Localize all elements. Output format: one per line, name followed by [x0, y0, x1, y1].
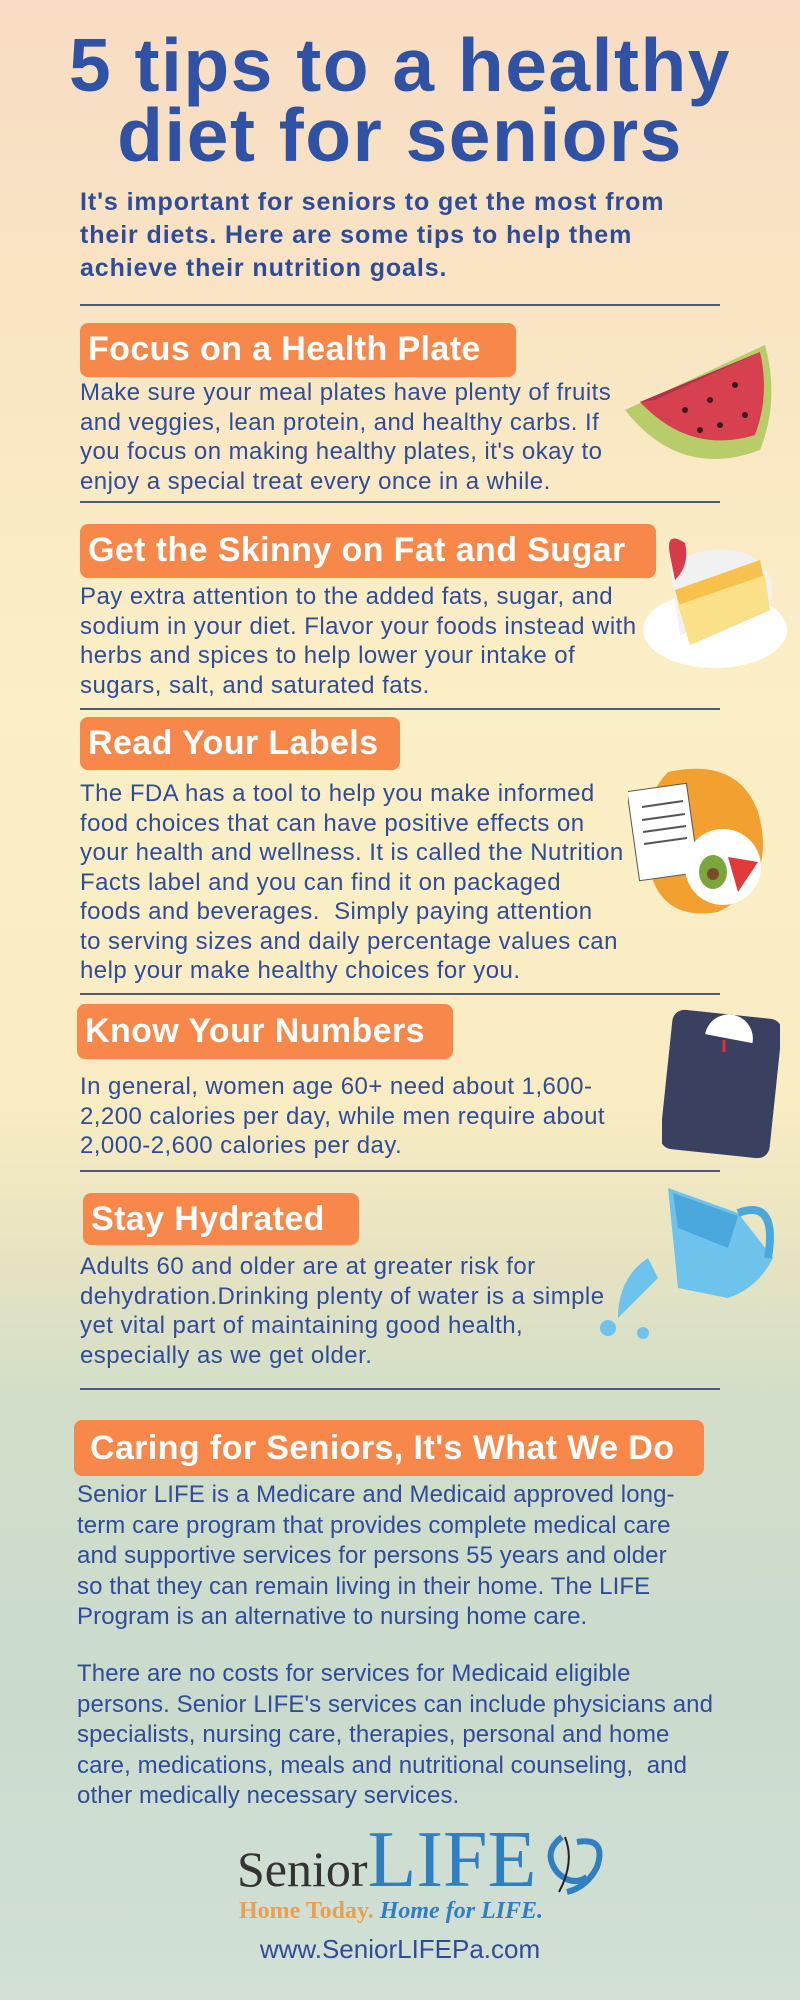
heading: labels: Read Your Labels [88, 724, 378, 762]
text: services: other medically necessary services. [77, 1782, 459, 1809]
heading: numbers [77, 1004, 453, 1059]
heading: fat and sugar: Get the Skinny on Fat and Sugar [88, 531, 626, 569]
text: labels: Facts label and you can find it on packaged [80, 868, 561, 896]
icon: water pitcher [600, 1188, 774, 1339]
text: numbers: In general, women age 60+ need about 1,600- [80, 1073, 592, 1100]
logo: SeniorLIFE [237, 1816, 536, 1904]
heading: hydrated [83, 1193, 359, 1245]
text: hydrated: dehydration.Drinking plenty of water is a simple [80, 1282, 605, 1310]
intro text [80, 188, 664, 282]
text: health plate: enjoy a special treat every once in a while. [80, 468, 551, 494]
text: health plate [80, 379, 611, 494]
icon: ribbon [548, 1834, 602, 1895]
text: numbers: 2,200 calories per day, while men require about [80, 1102, 605, 1130]
text: labels: your health and wellness. It is called the Nutrition [80, 839, 624, 866]
text: numbers: 2,000-2,600 calories per day. [80, 1132, 402, 1159]
text: labels: The FDA has a tool to help you make informed [80, 780, 595, 807]
text: about senior life [77, 1481, 675, 1630]
text: fat and sugar: herbs and spices to help lower your intake of [80, 642, 575, 669]
logo: Home Today. Home for LIFE. [239, 1898, 543, 1924]
text: labels: to serving sizes and daily percentage values can [80, 928, 618, 954]
text: about senior life: so that they can remain living in their home. The LIFE [77, 1573, 650, 1600]
heading: caring: Caring for Seniors, It's What We Do [90, 1429, 674, 1467]
text: labels: help your make healthy choices for you. [80, 957, 520, 984]
icon: scale [662, 1010, 780, 1158]
text: about senior life: and supportive services for persons 55 years and older [77, 1542, 667, 1569]
text: fat and sugar: sugars, salt, and saturated fats. [80, 672, 430, 698]
text: labels [80, 780, 624, 984]
heading: health plate: Focus on a Health Plate [88, 330, 481, 368]
intro text: It's important for seniors to get the most from [80, 188, 664, 216]
icon: watermelon [625, 345, 772, 459]
heading: labels [80, 717, 400, 770]
text: hydrated: Adults 60 and older are at greater risk for [80, 1253, 536, 1280]
text: services: There are no costs for services for Medicaid eligible [77, 1660, 631, 1687]
text: numbers [80, 1073, 605, 1159]
heading: health plate [80, 323, 516, 377]
intro text: achieve their nutrition goals. [80, 254, 447, 282]
text: about senior life: term care program that provides complete medical care [77, 1512, 671, 1539]
icon: cake [643, 538, 787, 668]
text: services: specialists, nursing care, therapies, personal and home [77, 1721, 670, 1748]
heading: caring [74, 1420, 704, 1476]
text: labels: food choices that can have positive effects on [80, 810, 585, 836]
title [69, 23, 731, 177]
text: fat and sugar: Pay extra attention to the added fats, sugar, and [80, 583, 613, 610]
text: hydrated: especially as we get older. [80, 1342, 372, 1368]
logo [237, 1816, 602, 1924]
text: health plate: and veggies, lean protein, and healthy carbs. If [80, 408, 599, 436]
title: 5 tips to a healthy [69, 23, 731, 107]
heading: numbers: Know Your Numbers [85, 1012, 425, 1050]
text: about senior life: Senior LIFE is a Medicare and Medicaid approved long- [77, 1481, 675, 1508]
text: hydrated: yet vital part of maintaining good health, [80, 1312, 523, 1339]
text: health plate: Make sure your meal plates have plenty of fruits [80, 379, 611, 406]
heading: fat and sugar [80, 524, 656, 578]
text: labels: foods and beverages. Simply paying attention [80, 898, 593, 925]
text: hydrated [80, 1253, 605, 1368]
text: fat and sugar: sodium in your diet. Flavor your foods instead with [80, 612, 637, 640]
text: fat and sugar [80, 583, 637, 698]
text: health plate: you focus on making healthy plates, it's okay to [80, 438, 602, 465]
text: services: persons. Senior LIFE's services can include physicians and [77, 1691, 713, 1718]
text: services [77, 1660, 713, 1809]
text: about senior life: Program is an alternative to nursing home care. [77, 1603, 587, 1630]
heading: hydrated: Stay Hydrated [91, 1200, 325, 1238]
title: diet for seniors [117, 93, 683, 177]
intro text: their diets. Here are some tips to help them [80, 221, 632, 249]
url: www.SeniorLIFEPa.com [260, 1934, 540, 1964]
icon: nutrition label and plate [628, 768, 763, 914]
text: services: care, medications, meals and nutritional counseling, and [77, 1752, 687, 1779]
